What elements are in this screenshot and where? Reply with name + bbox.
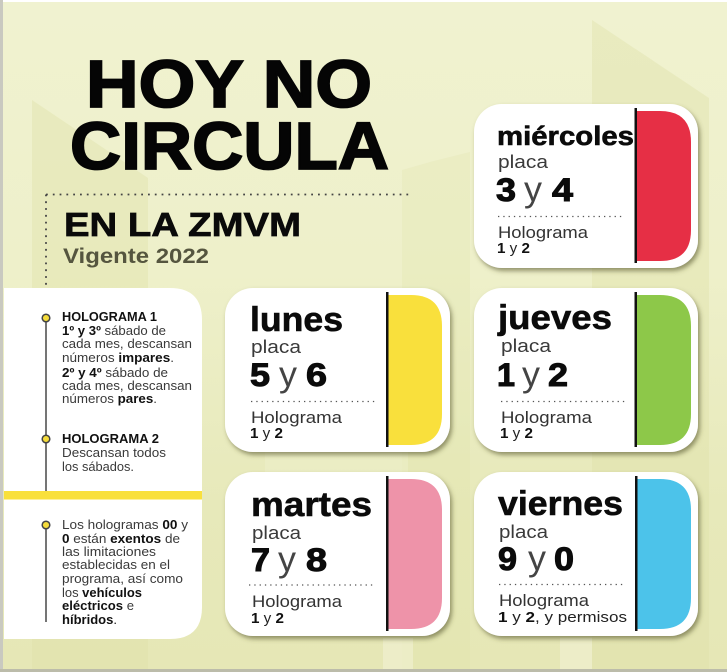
card: jueves: jueves <box>497 299 612 337</box>
text: exemptions: establecidas en el <box>62 558 170 572</box>
text: exemptions: Los hologramas 00 y <box>62 518 187 532</box>
title <box>70 47 389 184</box>
card: lunes: 1 y 2 <box>250 425 283 442</box>
text: exemptions: 0 están exentos de <box>62 532 179 546</box>
text: exemptions: híbridos. <box>62 613 117 627</box>
text: hologram 2: HOLOGRAMA 2 <box>62 432 159 446</box>
card: miércoles: 4 <box>552 172 573 208</box>
card: miércoles: 1 y 2 <box>497 240 530 257</box>
card: martes: Holograma <box>252 592 343 611</box>
card: viernes: 9 <box>498 541 517 577</box>
card: jueves: 1 <box>497 357 515 393</box>
card: viernes: viernes <box>498 485 623 523</box>
card: martes <box>225 472 450 636</box>
card: lunes: lunes <box>250 301 343 339</box>
card: martes: 8 <box>306 542 327 578</box>
card: lunes: 5 <box>250 357 270 393</box>
text: exemptions: las limitaciones <box>62 545 156 559</box>
card: miércoles: placa <box>498 152 549 172</box>
card: viernes: 0 <box>554 541 574 577</box>
text: hologram 1: 1º y 3º sábado de <box>62 324 163 338</box>
title: HOY NO <box>86 47 372 122</box>
text: exemptions: eléctricos e <box>62 599 134 613</box>
card: miércoles <box>474 104 698 268</box>
text: hologram 1: HOLOGRAMA 1 <box>62 310 157 324</box>
timeline <box>42 314 50 622</box>
card: viernes: y <box>528 539 547 578</box>
card: martes: 7 <box>251 542 270 578</box>
card: miércoles: 3 <box>496 172 516 208</box>
yellow divider <box>4 491 202 500</box>
card: lunes: y <box>279 355 298 394</box>
subtitle: vigente 2022: Vigente 2022 <box>63 245 209 268</box>
card: jueves: y <box>522 355 541 394</box>
text: hologram 1: cada mes, descansan <box>62 337 192 351</box>
card: jueves: 1 y 2 <box>500 425 533 442</box>
card: miércoles: Holograma <box>498 223 589 242</box>
card: martes: placa <box>252 523 302 543</box>
text: exemptions: los vehículos <box>62 586 140 600</box>
title: CIRCULA <box>70 109 389 184</box>
card: jueves: Holograma <box>501 408 593 427</box>
card: lunes: 6 <box>306 357 327 393</box>
text: hologram 1: números pares. <box>62 392 157 406</box>
text: hologram 1: 2º y 4º sábado de <box>62 366 163 380</box>
dotted connector <box>46 194 410 312</box>
card: viernes: 1 y 2, y permisos <box>498 609 627 626</box>
card: viernes: placa <box>499 522 549 542</box>
text: hologram 2: los sábados. <box>62 460 134 474</box>
card: jueves: 2 <box>548 357 568 393</box>
card: viernes: Holograma <box>499 591 590 610</box>
subtitle: en la ZMVM: EN LA ZMVM <box>64 206 301 243</box>
card: lunes <box>225 288 450 452</box>
card: viernes <box>474 472 698 636</box>
card: miércoles: y <box>524 170 543 209</box>
card: jueves: placa <box>501 336 552 356</box>
card: miércoles: miércoles <box>497 121 634 151</box>
panel: hologram notes <box>4 288 202 639</box>
card: lunes: Holograma <box>251 408 343 427</box>
text: exemptions: programa, así como <box>62 572 183 586</box>
text: hologram 1: números impares . <box>62 351 174 365</box>
text: hologram 2: Descansan todos <box>62 446 166 460</box>
text: hologram 1: cada mes, descansan <box>62 379 192 393</box>
card: martes: y <box>278 540 297 579</box>
card: lunes: placa <box>251 337 302 357</box>
card: martes: martes <box>251 486 372 524</box>
card: jueves <box>474 288 698 452</box>
card: martes: 1 y 2 <box>251 610 284 627</box>
